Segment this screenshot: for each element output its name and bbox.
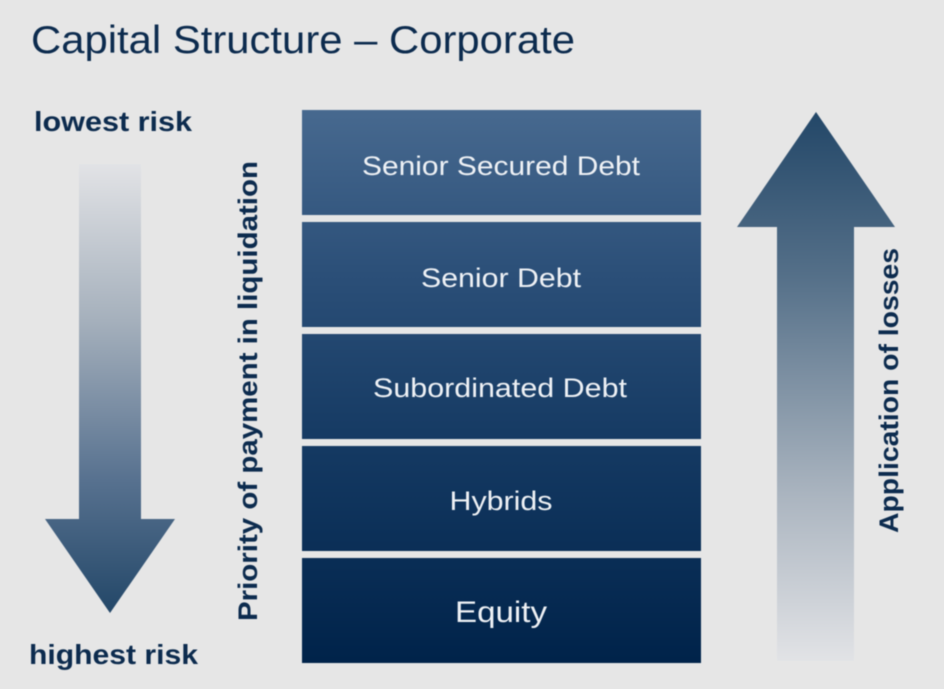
tier: subordinated debt <box>302 334 701 439</box>
label: highest risk: highest risk <box>29 639 198 670</box>
tier: senior debt: Senior Debt <box>421 263 582 293</box>
arrow: application of losses upward <box>737 112 895 661</box>
tier: hybrids <box>302 446 701 551</box>
label: lowest risk: lowest risk <box>34 106 192 137</box>
label: priority of payment in liquidation: Priority of payment in liquidation <box>233 161 263 621</box>
capital stack <box>302 110 701 663</box>
tier: senior secured debt <box>302 110 701 215</box>
tier: equity <box>302 558 701 663</box>
tier: subordinated debt: Subordinated Debt <box>373 373 628 403</box>
tier: hybrids: Hybrids <box>450 486 552 516</box>
tier: senior secured debt: Senior Secured Debt <box>362 151 641 181</box>
tier: senior debt <box>302 222 701 327</box>
arrow: risk increases downward <box>45 164 175 613</box>
title: Capital Structure – Corporate <box>31 19 575 62</box>
tier: equity: Equity <box>455 596 547 629</box>
label: application of losses: Application of losses <box>874 248 904 533</box>
